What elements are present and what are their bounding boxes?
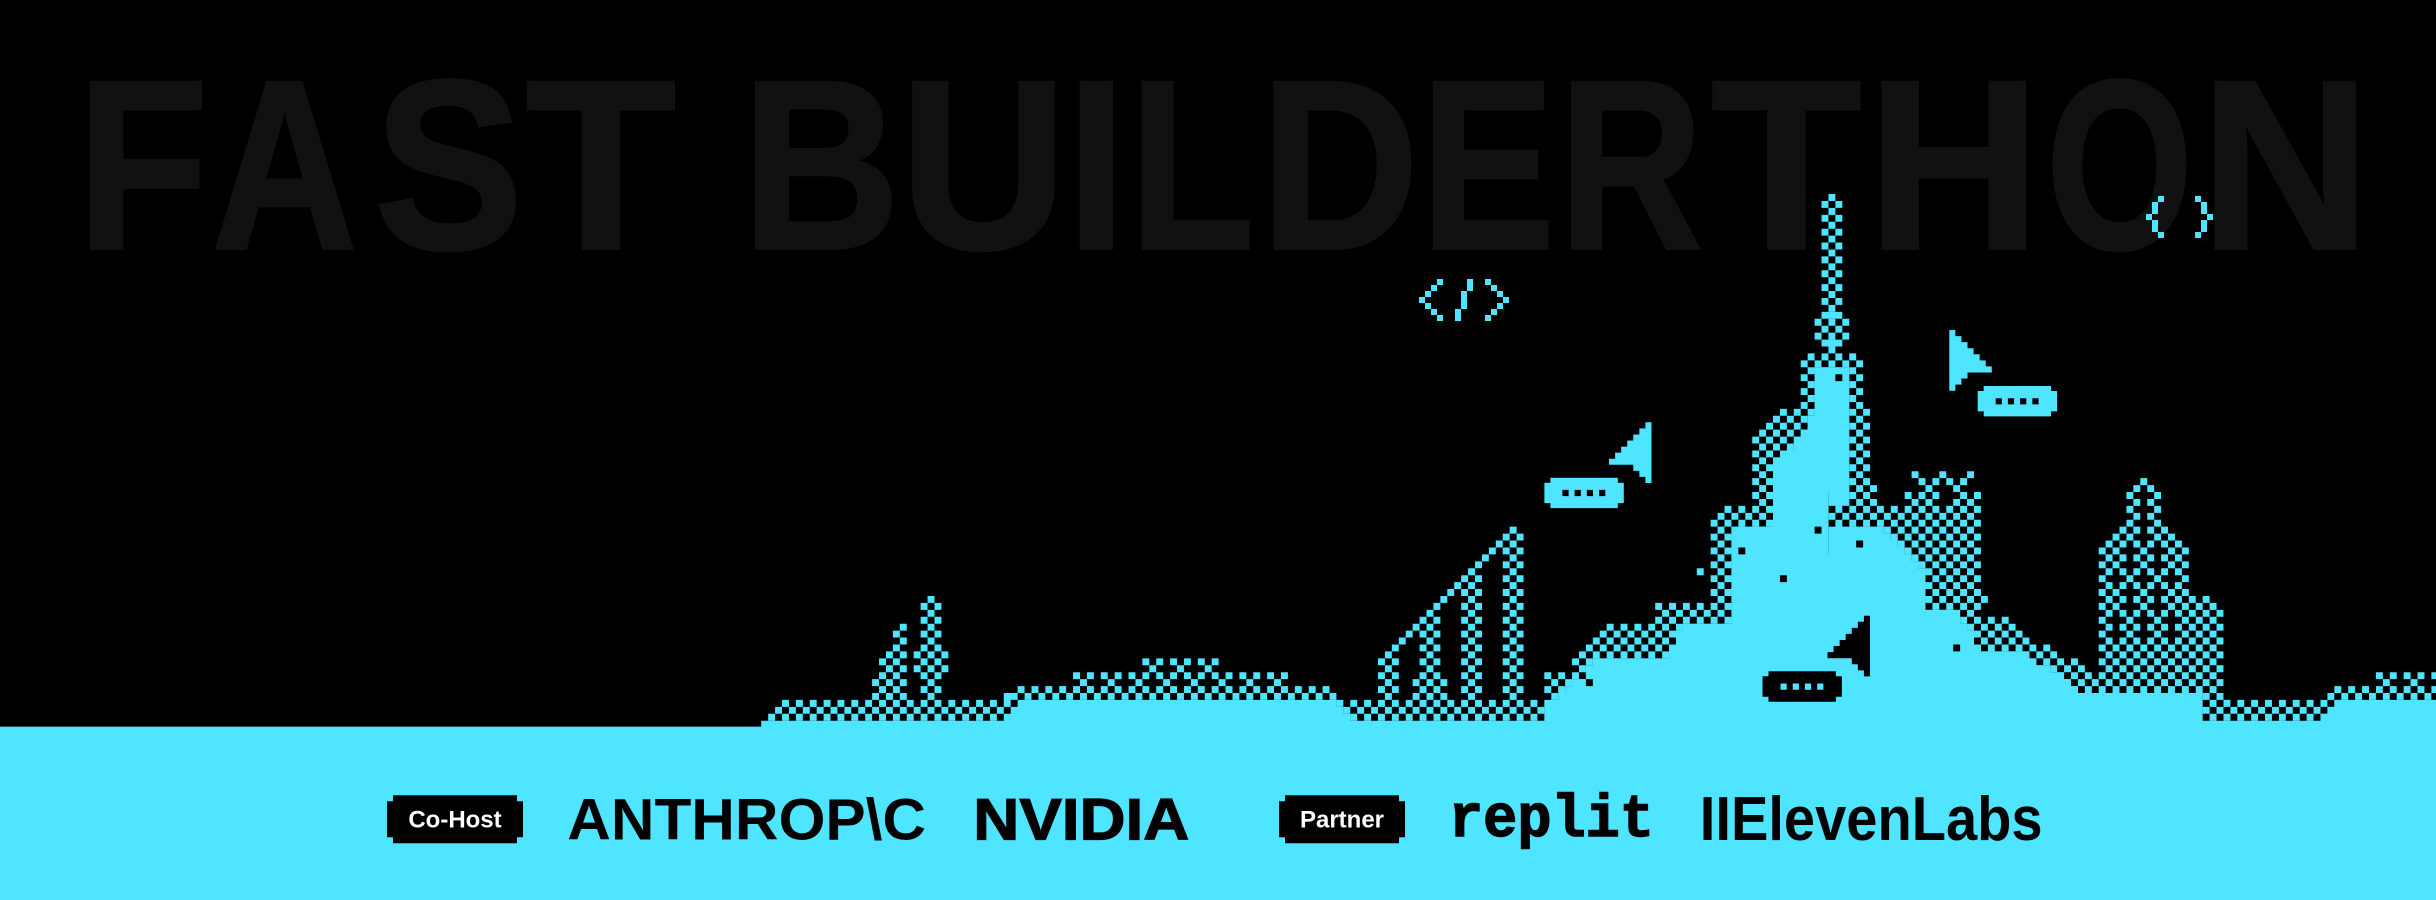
title: FAST BUILDERTHON: U: [900, 31, 1068, 300]
title: FAST BUILDERTHON: S: [374, 31, 523, 300]
title: FAST BUILDERTHON: I: [1066, 31, 1126, 300]
logo: Anthropic: ANTHROP\C: [567, 787, 926, 852]
badge: Co-Host: [387, 795, 523, 843]
title: FAST BUILDERTHON: O: [2046, 30, 2193, 301]
title: FAST BUILDERTHON: T: [526, 30, 676, 300]
title: FAST BUILDERTHON: R: [1559, 29, 1703, 300]
title: FAST BUILDERTHON: A: [212, 30, 357, 301]
black pixel holes in the mountain: [1586, 374, 1960, 686]
icon: curly braces: [2146, 196, 2213, 238]
title: FAST BUILDERTHON: E: [1420, 31, 1555, 301]
title: FAST BUILDERTHON: N: [2200, 30, 2370, 300]
title: FAST BUILDERTHON: L: [1129, 30, 1255, 300]
dithered skyline towers: [768, 198, 2436, 717]
title: FAST BUILDERTHON: B: [742, 30, 900, 300]
logo: replit: replit: [1449, 787, 1654, 855]
title: FAST BUILDERTHON: T: [1711, 30, 1862, 300]
label pill: top right: [1978, 386, 2057, 416]
logo: NVIDIA: NVIDIA: [973, 788, 1189, 853]
cursor: black on mountain: [1828, 616, 1870, 676]
solid cyan ground and mountain: [0, 312, 2436, 900]
title: FAST BUILDERTHON: D: [1260, 31, 1419, 301]
badge: Co-Host: Co-Host: [408, 807, 502, 834]
label pill: left: [1544, 478, 1624, 508]
cursor: top right: [1949, 330, 1992, 391]
cursor: left: [1609, 422, 1652, 483]
badge: Partner: Partner: [1300, 807, 1384, 834]
icon: code tag: [1419, 279, 1509, 321]
title: FAST BUILDERTHON: [76, 29, 2370, 301]
pixel skyline and ground: [0, 198, 2436, 900]
title: FAST BUILDERTHON: H: [1866, 31, 2041, 301]
label pill: black on mountain: [1762, 671, 1842, 702]
logo: ElevenLabs: IIElevenLabs: [1700, 785, 2043, 854]
title: FAST BUILDERTHON: F: [76, 29, 209, 300]
badge: Partner: [1279, 795, 1405, 843]
